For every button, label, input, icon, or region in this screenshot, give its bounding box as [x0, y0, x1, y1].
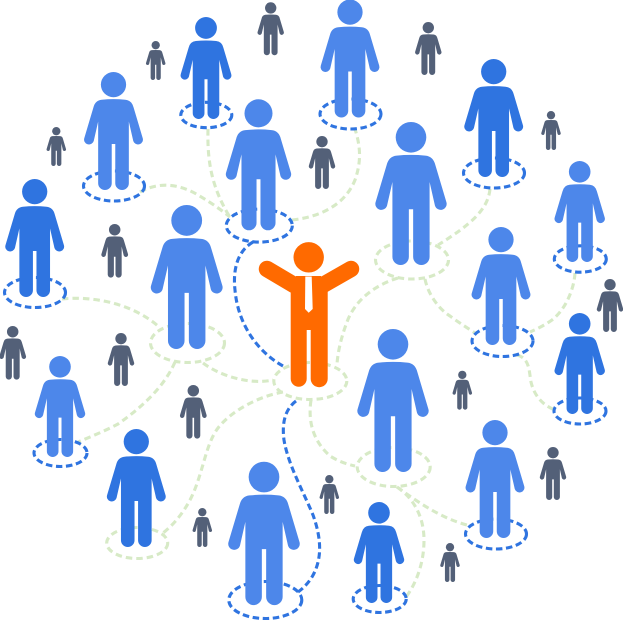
green connectors — [62, 129, 575, 597]
necktie — [305, 276, 313, 313]
blue connectors — [234, 242, 320, 592]
central orange figure — [267, 242, 351, 387]
green rings — [107, 241, 448, 558]
